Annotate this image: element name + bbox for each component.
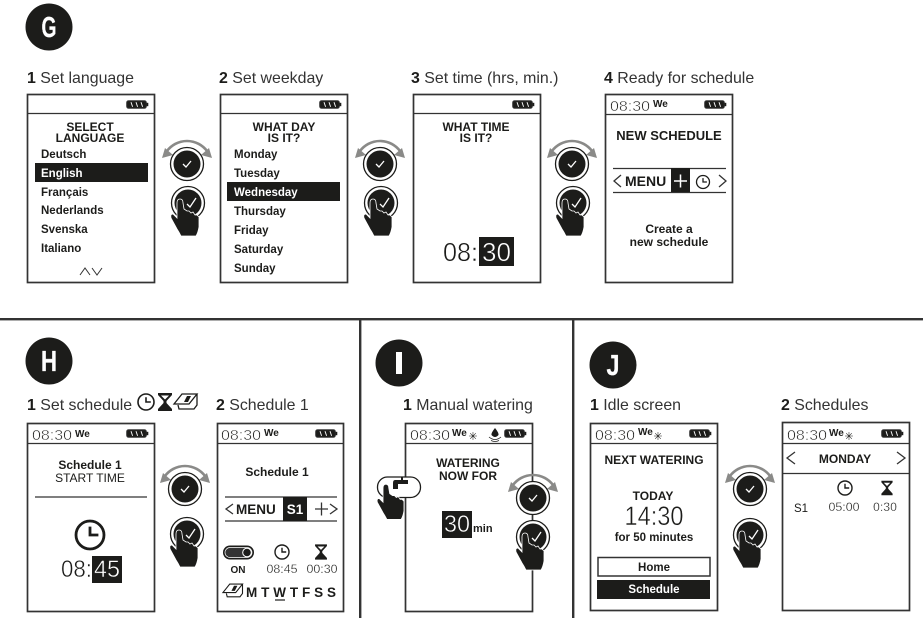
screen: time: WHAT TIME: [442, 120, 510, 134]
step label 2 Schedule 1: 2 Schedule 1: [216, 397, 309, 414]
screen: schedules: 08:30: [787, 427, 827, 444]
screen: start time: Schedule 1: [58, 458, 122, 472]
screen: weekday: IS IT?: [268, 131, 300, 145]
screen: select language: Deutsch: [41, 149, 86, 161]
icons: clock, hourglass, calendar: [138, 393, 197, 411]
panel: G initial setup: [26, 4, 754, 282]
screen: schedule 1: [217, 424, 344, 612]
screen: weekday: WHAT DAY: [253, 120, 315, 134]
screen: watering now: ✳: [468, 431, 478, 443]
dial control 1: [162, 141, 212, 236]
screen: new schedule: new schedule: [630, 235, 709, 249]
screen: schedule 1: S1: [287, 502, 304, 517]
icon: tap button pressed: [377, 477, 420, 519]
screen: schedule 1: ON: [230, 565, 246, 576]
panel: H schedule: [26, 338, 344, 612]
screen: next watering: ✳: [653, 431, 663, 443]
dial control 2: [355, 141, 405, 236]
screen: start time: 08:: [61, 556, 92, 583]
screen: next watering: NEXT WATERING: [604, 453, 704, 467]
screen: time: [413, 94, 541, 282]
screen: next watering: Home: [638, 562, 670, 574]
screen: schedules: 05:00: [828, 500, 860, 514]
panel: I manual watering: [376, 340, 558, 612]
screen: select language: [27, 94, 155, 282]
screen: schedule 1: Schedule 1: [245, 465, 309, 479]
screen: weekday: Monday: [234, 149, 278, 161]
screen: select language: Svenska: [41, 224, 88, 236]
screen: new schedule: 08:30: [610, 98, 650, 115]
screen: schedules: 0:30: [873, 500, 897, 514]
screen: next watering: We: [638, 427, 653, 438]
screen: schedule 1: MENU: [236, 502, 276, 517]
screen: select language: SELECT: [66, 120, 114, 134]
screen: schedules: MONDAY: [819, 452, 871, 466]
step label 3 Set time: 3 Set time (hrs, min.): [411, 70, 558, 87]
screen: weekday: Saturday: [234, 244, 284, 256]
screen: watering now: We: [452, 428, 467, 439]
screen: new schedule: We: [653, 99, 668, 110]
screen: weekday: Tuesday: [234, 168, 280, 180]
screen: watering now: WATERING: [436, 456, 500, 470]
step label 4 Ready for schedule: 4 Ready for schedule: [604, 70, 754, 87]
screen: next watering: Schedule: [628, 584, 680, 596]
screen: start time: 45: [94, 556, 120, 583]
screen: watering now: min: [473, 523, 493, 535]
badge J: [590, 342, 636, 388]
screen: start time: [27, 424, 155, 612]
step label 2 Schedules: 2 Schedules: [781, 397, 869, 414]
screen: schedule 1: We: [264, 428, 279, 439]
screen: new schedule: MENU: [625, 173, 666, 189]
screen: schedule 1: 00:30: [306, 562, 338, 576]
screen: start time: We: [75, 429, 90, 440]
screen: schedule 1: 08:45: [266, 562, 298, 576]
screen: schedule 1: M T W T F S S: [246, 585, 336, 600]
dial control 3: [547, 141, 597, 236]
screen: schedules: S1: [794, 503, 808, 515]
screen: next watering: 08:30: [595, 427, 635, 444]
step label 1 Manual watering: 1 Manual watering: [403, 397, 533, 414]
screen: select language: Français: [41, 187, 88, 199]
screen: watering now: 30: [444, 511, 470, 538]
screen: select language: English: [41, 168, 83, 180]
screen: new schedule: NEW SCHEDULE: [616, 128, 722, 143]
screen: next watering: [590, 424, 718, 610]
dial control: [160, 466, 210, 567]
screen: weekday: Sunday: [234, 263, 276, 275]
badge H: [26, 338, 72, 384]
step label 1 Set schedule: 1 Set schedule: [27, 397, 132, 414]
screen: start time: START TIME: [55, 471, 125, 485]
step label 2 Set weekday: 2 Set weekday: [219, 70, 323, 87]
badge I: [376, 340, 422, 386]
screen: schedule 1: 08:30: [221, 427, 261, 444]
screen: new schedule: Create a: [645, 222, 693, 236]
section dividers: [0, 318, 923, 618]
badge J: J: [606, 350, 620, 382]
screen: weekday: Wednesday: [234, 187, 298, 199]
screen: select language: Italiano: [41, 243, 81, 255]
screen: select language: Nederlands: [41, 205, 104, 217]
step label 1 Set language: 1 Set language: [27, 70, 134, 87]
screen: watering now: 08:30: [410, 427, 450, 444]
panel: J idle screen: [590, 342, 910, 610]
step label 1 Idle screen: 1 Idle screen: [590, 397, 681, 414]
screen: schedules: We: [829, 428, 844, 439]
screen: watering now: NOW FOR: [439, 469, 497, 483]
screen: next watering: TODAY: [633, 489, 673, 503]
screen: time: 30: [482, 237, 511, 267]
screen: next watering: 14:30: [624, 501, 684, 531]
dial control: [508, 475, 558, 570]
screen: schedules: ✳: [844, 431, 854, 443]
badge G: [26, 4, 72, 50]
screen: time: IS IT?: [460, 131, 492, 145]
screen: watering now: [405, 424, 533, 612]
badge H: H: [41, 346, 57, 378]
screen: weekday: [220, 94, 348, 282]
screen: schedules: [782, 422, 910, 610]
screen: select language: LANGUAGE: [56, 131, 124, 145]
screen: start time: 08:30: [32, 427, 72, 444]
badge G: G: [42, 12, 56, 44]
screen: weekday: Friday: [234, 225, 269, 237]
screen: new schedule: [605, 94, 733, 282]
dial control: [725, 466, 775, 568]
screen: weekday: Thursday: [234, 206, 286, 218]
screen: next watering: for 50 minutes: [615, 532, 693, 544]
screen: time: 08:: [443, 237, 478, 267]
